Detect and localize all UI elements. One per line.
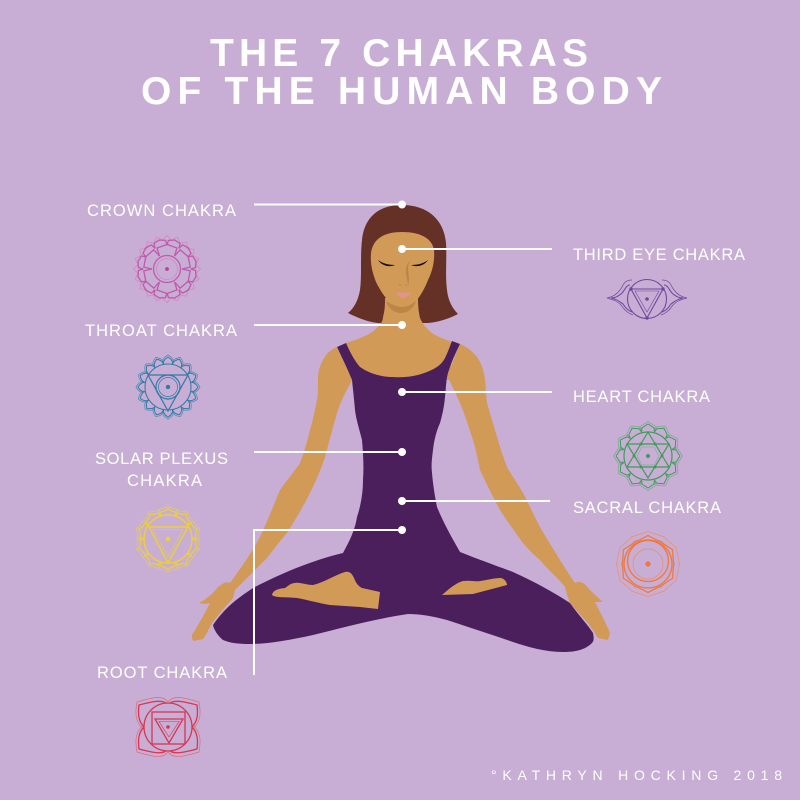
right foot	[442, 578, 507, 595]
label: heart chakra: HEART CHAKRA	[573, 388, 710, 406]
icon: third eye chakra	[607, 280, 687, 320]
icon: solar plexus chakra	[133, 506, 203, 572]
chin shadow	[386, 301, 416, 313]
right arm and hand	[448, 344, 610, 640]
left foot	[272, 572, 380, 609]
title: THE 7 CHAKRAS	[210, 32, 588, 75]
meditating woman figure	[192, 205, 610, 652]
left arm and hand	[192, 347, 352, 641]
label: crown chakra: CROWN CHAKRA	[87, 202, 236, 220]
icon: heart chakra	[614, 422, 682, 490]
dress	[213, 341, 594, 652]
copyright credit: °KATHRYN HOCKING 2018	[491, 767, 782, 783]
label: root chakra: ROOT CHAKRA	[97, 664, 227, 682]
label: solar plexus chakra: SOLAR PLEXUS	[95, 450, 228, 468]
right eye	[411, 260, 428, 266]
left eye	[378, 260, 395, 266]
hair	[348, 205, 458, 323]
nose shadow	[406, 258, 413, 286]
neck and chest	[346, 298, 453, 380]
face	[371, 232, 434, 307]
icon: throat chakra	[136, 355, 200, 419]
label: sacral chakra: SACRAL CHAKRA	[573, 499, 721, 517]
icon: sacral chakra	[612, 532, 684, 596]
label: third eye chakra: THIRD EYE CHAKRA	[573, 246, 745, 264]
icon: crown chakra	[134, 236, 200, 302]
nostrils	[399, 284, 407, 286]
label: solar plexus chakra	[95, 450, 228, 490]
icon: root chakra	[136, 697, 200, 757]
label: solar plexus chakra: CHAKRA	[127, 472, 202, 490]
label: throat chakra: THROAT CHAKRA	[85, 322, 237, 340]
lips	[396, 292, 411, 298]
title	[141, 32, 662, 113]
title: OF THE HUMAN BODY	[141, 70, 662, 113]
connector lines and dots	[253, 200, 552, 675]
